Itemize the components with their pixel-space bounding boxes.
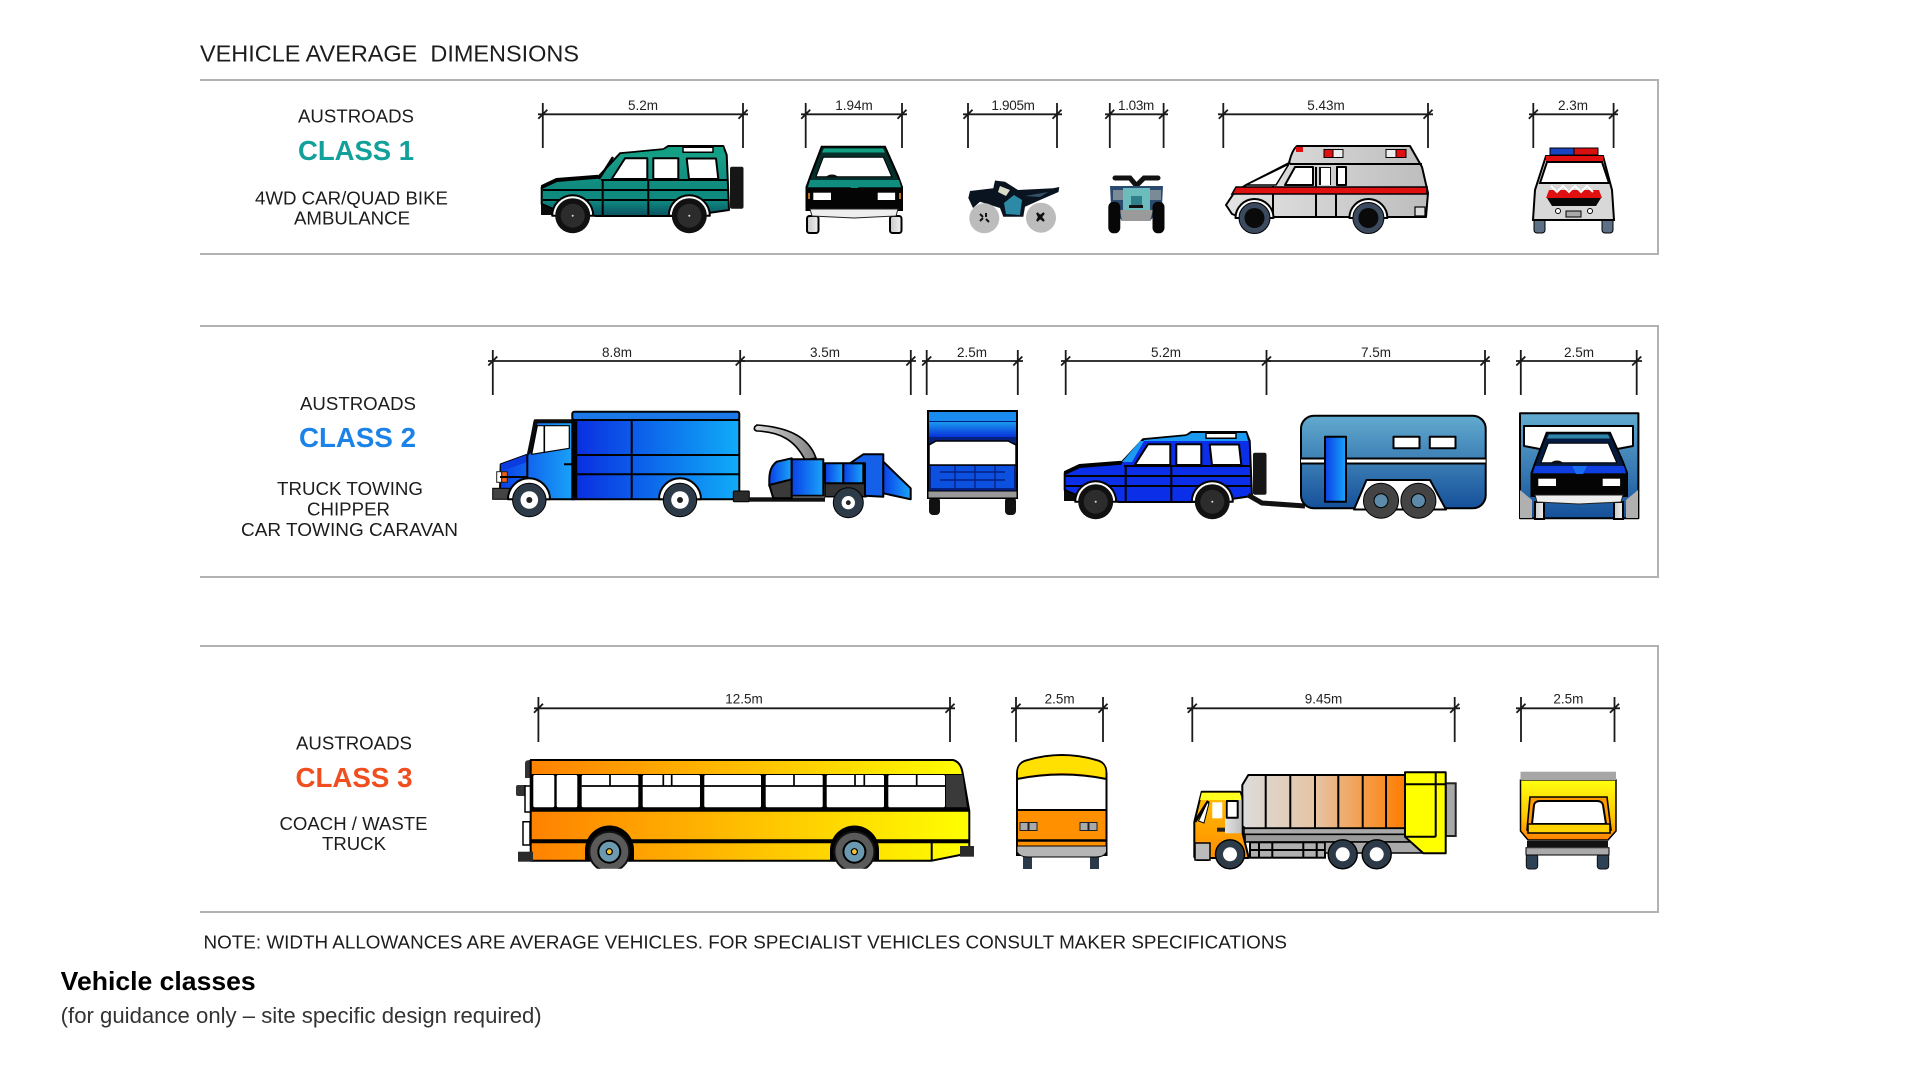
dimension: 2.5m bus [1011,692,1108,742]
dimension: 5.43m [1218,98,1433,148]
heading: vehicle classes: Vehicle classes [61,966,256,996]
vehicle: green 4WD side [541,146,744,233]
subheading: guidance: (for guidance only – site specific design required) [61,1003,542,1028]
label: class 2 text: TRUCK TOWING [277,479,423,499]
panel: class 1 [200,80,1658,254]
label: class 1 text [255,107,448,228]
vehicle: ambulance side [1226,146,1428,234]
dimension: 2.3m [1529,98,1618,148]
dimension: 8.8m: 8.8m [602,345,632,360]
label: class 2 text: CHIPPER [307,500,390,520]
dimension: 9.45m [1187,692,1460,742]
dimension: 2.5m truck: 2.5m [957,345,987,360]
vehicle: ambulance front [1533,148,1614,233]
dimension: 5.43m: 5.43m [1307,98,1345,113]
vehicle: bus side [516,760,974,872]
label: class 3 text: AUSTROADS [296,733,412,753]
dimension: 7.5m [1266,345,1490,395]
dimension: 2.3m: 2.3m [1558,98,1588,113]
label: class 1 text: 4WD CAR/QUAD BIKE [255,188,448,208]
dimension: 2.5m bus: 2.5m [1045,692,1075,706]
label: class 3 text: TRUCK [322,834,386,854]
vehicle: caravan and car front [1520,413,1638,519]
vehicle: green 4WD front [806,147,902,233]
panel: class 3 [200,646,1658,912]
label: class 1 text: AUSTROADS [298,107,414,127]
dimension: 7.5m: 7.5m [1361,345,1391,360]
vehicle: blue truck side [493,412,739,517]
label: class 2 text: CLASS 2 [299,422,416,453]
dimension: 5.2m [538,98,748,148]
dimension: 8.8m [488,345,745,395]
label: class 2 text [241,394,458,540]
vehicle: waste truck front [1520,772,1616,869]
title: VEHICLE AVERAGE DIMENSIONS [200,40,579,66]
dimension: 2.5m caravan [1516,345,1642,395]
note: NOTE: WIDTH ALLOWANCES ARE AVERAGE VEHICLES. FOR SPECIALIST VEHICLES CONSULT MAKER SPECIFICATIONS [204,932,1287,952]
dimension: 2.5m truck [922,345,1023,395]
dimension: 1.94m [801,98,907,148]
label: class 2 text: CAR TOWING CARAVAN [241,520,458,540]
vehicle: quad bike front [1108,178,1164,233]
label: class 3 text [280,733,428,854]
dimension: 1.94m: 1.94m [835,98,873,113]
label: class 1 text: AMBULANCE [294,208,410,228]
dimension: 12.5m [534,692,955,742]
dimension: 2.5m truck [1516,692,1620,742]
label: class 2 text: AUSTROADS [300,394,416,414]
vehicle: wood chipper [733,425,911,518]
vehicle: quad bike side [968,180,1059,233]
dimension: 1.905m [963,98,1062,148]
dimension: 5.2m car [1061,345,1271,395]
dimension: 5.2m car: 5.2m [1151,345,1181,360]
vehicle: bus front [1017,755,1106,869]
dimension: 9.45m: 9.45m [1305,692,1342,706]
dimension: 2.5m truck: 2.5m [1553,692,1583,706]
dimension: 5.2m: 5.2m [628,98,658,113]
vehicle: waste truck side [1194,772,1456,869]
panel: class 2 [200,326,1658,577]
label: class 1 text: CLASS 1 [298,135,414,166]
vehicle: caravan side [1248,416,1486,518]
label: class 3 text: CLASS 3 [296,762,412,793]
dimension: 3.5m: 3.5m [810,345,840,360]
dimension: 1.905m: 1.905m [991,98,1035,113]
dimension: 1.03m: 1.03m [1118,98,1154,113]
vehicle: blue truck front [928,411,1017,515]
dimension: 2.5m caravan: 2.5m [1564,345,1594,360]
dimension: 3.5m [740,345,916,395]
dimension: 1.03m [1105,98,1168,148]
label: class 3 text: COACH / WASTE [280,814,428,834]
dimension: 12.5m: 12.5m [725,692,763,706]
vehicle: blue 4WD side [1064,432,1266,519]
